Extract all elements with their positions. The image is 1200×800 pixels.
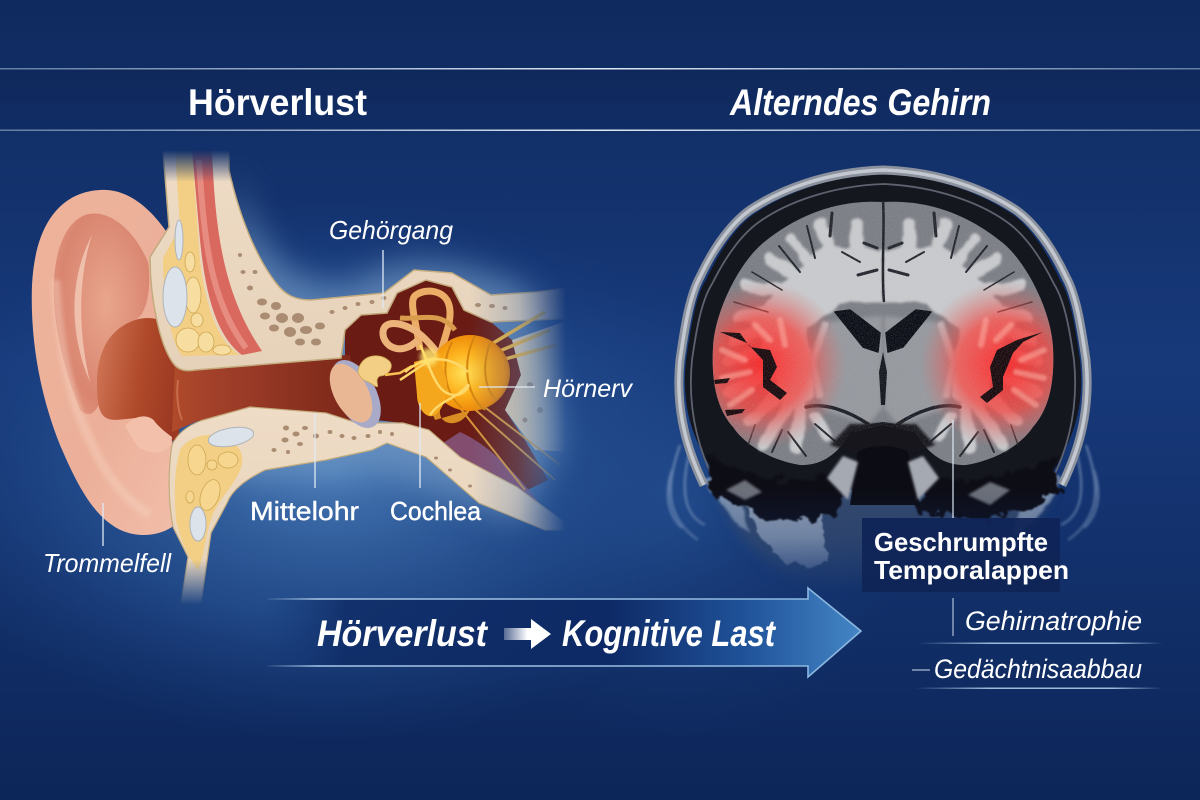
label: Trommelfell: Trommelfell	[43, 548, 172, 578]
label: Cochlea: Cochlea	[390, 496, 482, 526]
callout lines: ear	[103, 250, 535, 546]
upper temporal bone	[150, 150, 575, 422]
arrow text: Hörverlust: Hörverlust	[317, 613, 489, 654]
concha and ear canal	[97, 318, 360, 453]
scan grain	[712, 202, 1054, 465]
outcome: Gehirnatrophie: Gehirnatrophie	[965, 606, 1142, 636]
marrow	[175, 435, 242, 570]
header band	[0, 68, 1200, 131]
purple nerve band	[444, 432, 539, 502]
callout line: top to temporal box	[952, 420, 954, 518]
beige bone right of cochlea	[505, 322, 562, 451]
infographic canvas	[0, 68, 1200, 706]
eardrum and ossicle	[330, 355, 412, 428]
air cells	[163, 220, 187, 327]
left hemisphere	[713, 202, 883, 465]
label: Hörnerv: Hörnerv	[543, 375, 633, 403]
MRI brain scan	[668, 170, 1098, 590]
heading: Alterndes Gehirn: Alterndes Gehirn	[729, 82, 991, 123]
lower temporal bone	[169, 407, 575, 610]
outcome list	[912, 598, 1163, 689]
midline	[883, 200, 884, 302]
callout: Geschrumpfte Temporallappen	[862, 518, 1069, 592]
outcome: Gedächtnisaabbau: Gedächtnisaabbau	[934, 654, 1142, 684]
marrow bubbles	[176, 252, 231, 355]
callout: Geschrumpfte Temporallappen: Geschrumpfte	[874, 527, 1048, 557]
arrow text: Kognitive Last: Kognitive Last	[562, 613, 776, 654]
outer ear	[32, 190, 175, 535]
small white arrow	[504, 619, 551, 649]
deep canal and inner cavity	[170, 280, 548, 495]
red temporal highlight right	[926, 284, 1054, 446]
red highlight and sulci, clipped to brain	[712, 202, 1054, 465]
ear anatomy illustration	[32, 150, 575, 610]
red stripe	[192, 150, 262, 355]
dark sulcus left	[714, 332, 787, 416]
label: Mittelohr: Mittelohr	[250, 496, 359, 526]
outer wisps	[668, 445, 1098, 540]
head interior	[685, 174, 1081, 490]
marrow	[163, 150, 240, 356]
skull base	[708, 446, 1058, 520]
main arrow	[262, 588, 861, 677]
red temporal highlight left	[712, 284, 841, 446]
halo behind ear anatomy	[230, 170, 560, 520]
right hemisphere	[883, 202, 1053, 465]
pale gyri within highlight	[722, 320, 1044, 405]
dark sulcus right	[980, 332, 1043, 403]
label: Gehörgang: Gehörgang	[329, 215, 454, 245]
skull rings	[679, 170, 1087, 485]
cochlea and semicircular canals	[383, 291, 560, 490]
lower tissue	[706, 473, 1061, 575]
heading: Hörverlust: Hörverlust	[188, 82, 367, 123]
bone pores	[238, 253, 543, 422]
callout: Geschrumpfte Temporallappen: Temporalappen	[874, 555, 1069, 585]
